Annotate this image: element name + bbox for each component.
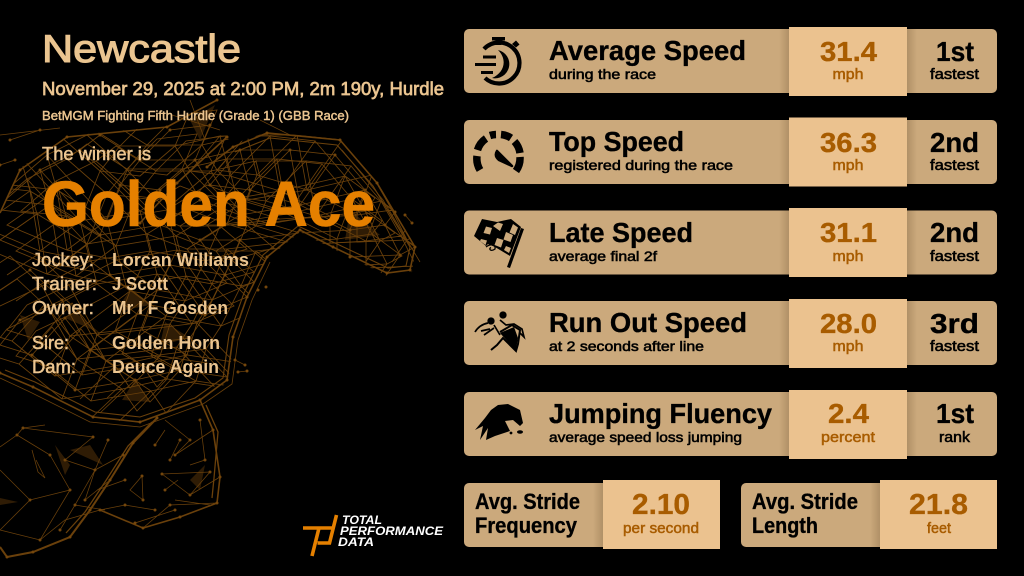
subheading: registered during the race [549, 157, 733, 173]
winner intro: The winner is [42, 144, 151, 164]
heading: Run Out Speed [549, 307, 747, 338]
connections list: Owner: [32, 298, 94, 318]
heading: Jumping Fluency [549, 398, 772, 429]
rank label: fastest [930, 158, 979, 174]
subheading: at 2 seconds after line [549, 338, 704, 354]
panel: top speed [464, 118, 997, 186]
title: venue: Newcastle [42, 28, 241, 71]
value: 2.4 [828, 398, 869, 429]
background: polygon network horse [0, 100, 431, 557]
connections list: Trainer: [32, 274, 97, 294]
rank: 3rd [930, 308, 979, 339]
logo: Total Performance Data: DATA [338, 537, 374, 549]
connections list: Deuce Again [112, 357, 219, 377]
connections list [32, 250, 249, 377]
subheading: during the race [549, 66, 656, 82]
winner name: Golden Ace [42, 168, 375, 240]
rank: 1st [936, 398, 974, 429]
rank: 1st [936, 36, 974, 67]
subheading: average speed loss jumping [549, 429, 742, 445]
unit: mph [832, 339, 864, 355]
value: 31.4 [820, 36, 877, 67]
unit: mph [832, 158, 864, 174]
label: Avg. Stride [475, 489, 580, 514]
heading: Late Speed [549, 217, 693, 248]
panel: average stride frequency [464, 480, 720, 549]
panel: average speed [464, 27, 997, 96]
icon: stopwatch [475, 37, 520, 84]
rank label: fastest [930, 249, 979, 265]
connections list: J Scott [112, 274, 168, 294]
icon: racing horses and jockeys [475, 312, 524, 351]
connections list: Golden Horn [112, 333, 220, 353]
rank label: rank [939, 430, 971, 446]
icon: chequered flag [474, 219, 524, 268]
unit: mph [832, 249, 864, 265]
race details: November 29, 2025 at 2:00 PM, 2m 190y, Hurdle [42, 78, 444, 99]
race name: BetMGM Fighting Fifth Hurdle (Grade 1) (GBB Race) [42, 109, 349, 123]
logo: Total Performance Data [303, 515, 443, 556]
unit: per second [623, 521, 699, 537]
unit: feet [927, 521, 951, 537]
panel: average stride length [741, 480, 997, 549]
value: 2.10 [632, 489, 690, 521]
panel: jumping fluency [464, 390, 997, 459]
label: Avg. Stride [752, 489, 858, 514]
value: 31.1 [820, 217, 877, 248]
panel: average stride length: Length [752, 513, 818, 538]
logo: Total Performance Data: TOTAL [342, 515, 382, 527]
connections list: Jockey: [32, 250, 94, 270]
panel: late speed [464, 208, 997, 277]
icon: jumping horse [475, 404, 523, 440]
connections list: Dam: [32, 357, 76, 377]
value: 21.8 [909, 489, 968, 521]
rank: 2nd [930, 217, 979, 248]
logo: Total Performance Data: PERFORMANCE [340, 526, 443, 538]
value: 36.3 [820, 127, 877, 158]
rank label: fastest [930, 339, 979, 355]
heading: Average Speed [549, 35, 746, 66]
icon: speedometer [477, 134, 520, 171]
rank label: fastest [930, 67, 979, 83]
wide contour bands [0, 100, 420, 557]
heading: Top Speed [549, 126, 684, 157]
connections list: Sire: [32, 333, 69, 353]
unit: percent [821, 430, 875, 446]
connections list: Mr I F Gosden [112, 298, 228, 318]
connections list: Lorcan Williams [112, 250, 249, 270]
value: 28.0 [820, 308, 877, 339]
unit: mph [832, 67, 864, 83]
panel: run out speed [464, 299, 997, 368]
subheading: average final 2f [549, 248, 657, 264]
panel: average stride frequency: Frequency [475, 513, 578, 538]
rank: 2nd [930, 127, 979, 158]
